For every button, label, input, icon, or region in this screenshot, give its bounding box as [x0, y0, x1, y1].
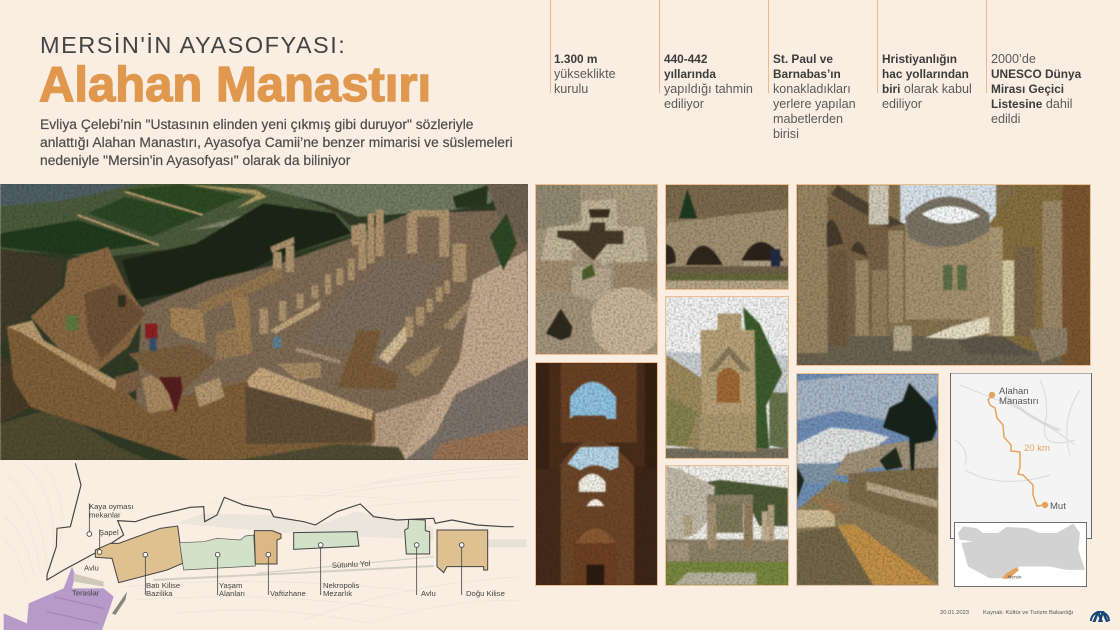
locator map: Alahan to Mut route: 20 km	[1024, 443, 1050, 454]
site plan labels: Batı Kilise	[146, 581, 180, 590]
intro text: nedeniyle "Mersin'in Ayasofyası" olarak da biliniyor	[40, 152, 350, 168]
leader points	[87, 532, 464, 557]
route line	[988, 395, 1045, 506]
east church	[437, 530, 488, 573]
fact: UNESCO: Mirası Geçici	[991, 82, 1064, 96]
site plan of the monastery	[4, 463, 526, 630]
columns	[259, 209, 466, 337]
fact: construction date: yapıldığı tahmin	[664, 82, 753, 96]
fact: UNESCO: Listesine dahil	[991, 97, 1072, 111]
fact: pilgrimage route	[877, 0, 972, 111]
fact: UNESCO: edildi	[991, 112, 1020, 126]
site plan labels: Vaftizhane	[270, 589, 306, 598]
baptistery	[254, 531, 281, 564]
west basilica	[95, 526, 183, 583]
fact: construction date	[659, 0, 753, 111]
site plan labels: Sütunlu Yol	[332, 559, 371, 570]
fact: St. Paul and Barnabas: St. Paul ve	[773, 52, 833, 66]
inset map of Turkey	[954, 522, 1087, 587]
photo: church interior arches	[535, 362, 658, 586]
fact: pilgrimage route: Hristiyanlığın	[882, 52, 957, 66]
site plan labels: mekanlar	[89, 510, 121, 520]
site plan labels: Şapel	[99, 528, 119, 537]
Mut point	[1042, 502, 1048, 508]
locator map: Alahan to Mut route: Manastırı	[999, 396, 1039, 407]
site plan labels: Kaya oyması	[89, 502, 133, 511]
intro text	[40, 116, 513, 168]
photo: monumental stele	[665, 296, 789, 459]
fact: UNESCO	[986, 0, 1082, 126]
locator map: Alahan to Mut route: Alahan	[999, 386, 1029, 397]
front wall	[7, 327, 375, 460]
fact: pilgrimage route: hac yollarından	[882, 67, 969, 81]
site plan labels: Yaşam	[219, 581, 242, 590]
fact: construction date: ediliyor	[664, 97, 704, 111]
icon: AA logo	[1090, 611, 1110, 622]
fact: UNESCO: UNESCO Dünya	[991, 67, 1081, 81]
terraces	[4, 567, 127, 630]
inset map of Turkey: Mersin	[1007, 575, 1022, 580]
site plan labels: Alanları	[219, 589, 245, 598]
site plan labels: Avlu	[421, 589, 436, 598]
background contours	[4, 463, 524, 623]
locator map: Alahan to Mut route	[950, 373, 1092, 539]
fact: construction date: 440-442	[664, 52, 707, 66]
site plan labels: Mezarlık	[323, 589, 352, 598]
source: Kaynak: Kültür ve Turizm Bakanlığı	[983, 610, 1073, 616]
fact: St. Paul and Barnabas: yerlere yapılan	[773, 97, 856, 111]
fact: altitude: 1.300 m	[554, 52, 597, 66]
Alahan point	[989, 392, 995, 398]
intro text: Evliya Çelebi’nin "Ustasının elinden yeni çıkmış gibi duruyor" sözleriyle	[40, 116, 474, 132]
photo: carved cross in rock	[535, 184, 658, 355]
title: MERSİN'İN AYASOFYASI:	[40, 32, 346, 58]
west building walls	[30, 247, 145, 370]
site plan labels: Teraslar	[72, 588, 100, 598]
outer wall	[47, 463, 514, 580]
fact: St. Paul and Barnabas: Barnabas’ın	[773, 67, 841, 81]
necropolis	[294, 532, 359, 549]
fact: St. Paul and Barnabas	[768, 0, 856, 141]
fact: altitude: kurulu	[554, 82, 588, 96]
fact: St. Paul and Barnabas: mabetlerden	[773, 112, 843, 126]
site plan labels: Avlu	[84, 564, 99, 572]
main heading: Alahan Manastırı	[39, 58, 431, 112]
intro text: anlattığı Alahan Manastırı, Ayasofya Camii’ne benzer mimarisi ve süslemeleri	[40, 134, 513, 150]
fact: altitude	[550, 0, 616, 96]
living areas	[180, 535, 255, 570]
fact: pilgrimage route: ediliyor	[882, 97, 922, 111]
fact: pilgrimage route: biri olarak kabul	[882, 82, 972, 96]
site plan labels: Doğu Kilise	[466, 589, 505, 598]
date: 20.01.2023	[940, 610, 969, 616]
photo: rock-cut niches	[665, 184, 789, 290]
site plan labels	[72, 502, 505, 598]
photo: path along the ruins	[796, 373, 939, 586]
courtyard	[405, 519, 430, 554]
fact: St. Paul and Barnabas: birisi	[773, 127, 799, 141]
photo: church apse interior	[796, 184, 1091, 366]
photo: aerial view of the monastery ruins	[0, 184, 528, 460]
photo: ruined gate	[665, 465, 789, 586]
fact: construction date: yıllarında	[664, 67, 716, 81]
site plan labels: Bazilika	[146, 589, 173, 598]
fact: St. Paul and Barnabas: konakladıkları	[773, 82, 851, 96]
fact: UNESCO: 2000’de	[991, 52, 1036, 66]
fact: altitude: yükseklikte	[554, 67, 616, 81]
site plan labels: Nekropolis	[323, 581, 359, 590]
locator map: Alahan to Mut route: Mut	[1050, 501, 1066, 512]
leader lines	[89, 503, 462, 595]
